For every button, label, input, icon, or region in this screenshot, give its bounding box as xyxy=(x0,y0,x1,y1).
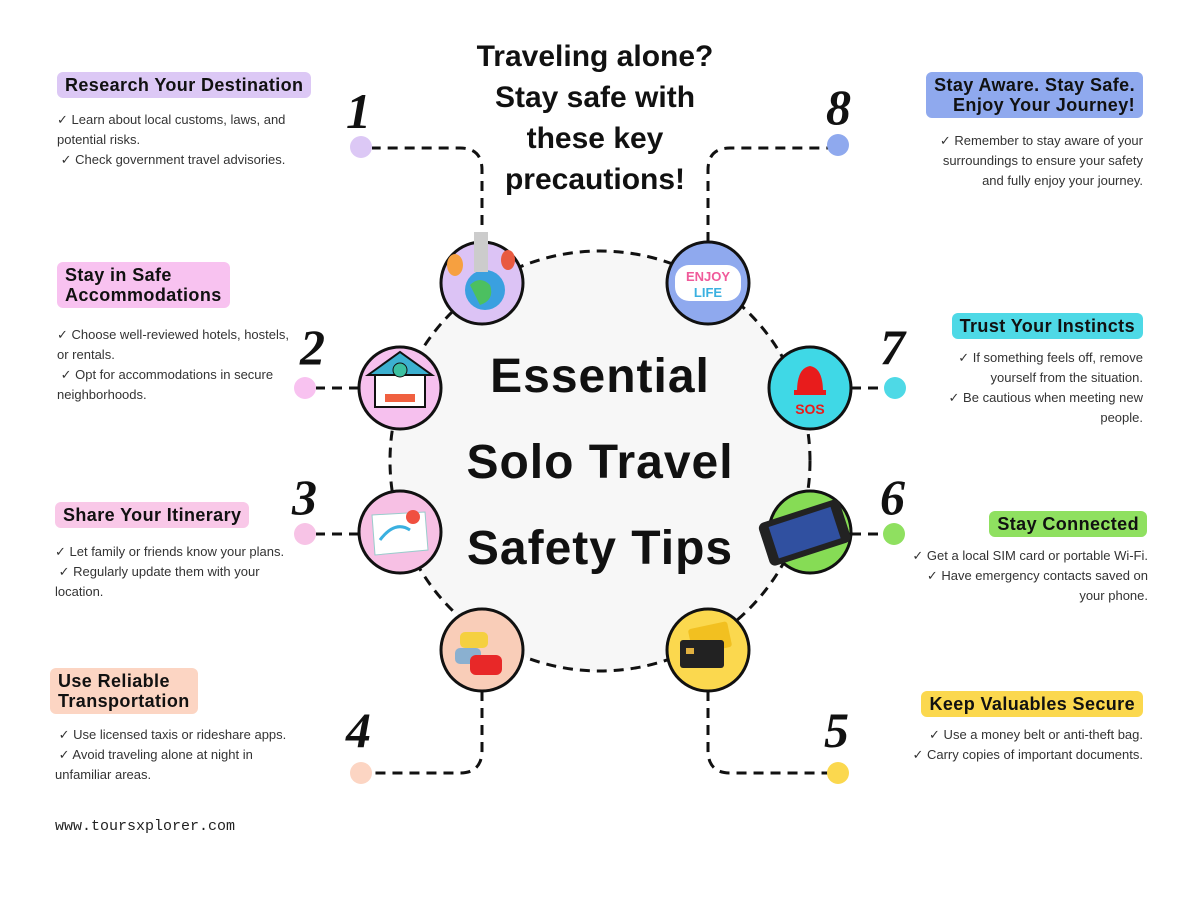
numbers: 1 xyxy=(346,83,371,139)
title: Essential Solo Travel Safety Tips: Essential xyxy=(490,350,710,403)
panel 8: Enjoy Your Journey! xyxy=(953,95,1135,115)
panel 5: Keep Valuables Secure xyxy=(929,694,1135,714)
text: 3 xyxy=(292,469,317,525)
title: Essential Solo Travel Safety Tips: Safety Tips xyxy=(467,522,733,575)
dots xyxy=(294,134,906,784)
panel 4: Transportation xyxy=(58,691,190,711)
title: Essential Solo Travel Safety Tips: Solo Travel xyxy=(466,436,734,489)
title: Traveling alone? xyxy=(477,40,713,73)
icon: SOS bell: SOS xyxy=(795,401,825,417)
panel 2: Accommodations xyxy=(65,285,222,305)
text: 6 xyxy=(880,469,905,525)
text: ✓ Learn about local customs, laws, and potential risks. xyxy=(57,112,285,147)
text: ✓ Check government travel advisories. xyxy=(61,152,285,167)
text: ✓ Get a local SIM card or portable Wi-Fi. xyxy=(912,548,1148,563)
panel 7: Trust Your Instincts xyxy=(960,316,1135,336)
text: ✓ Use licensed taxis or rideshare apps. xyxy=(59,727,286,742)
text: ✓ If something feels off, remove yourself from the situation. xyxy=(958,350,1143,385)
icon: SOS bell xyxy=(794,366,826,417)
text: ✓ Be cautious when meeting new people. xyxy=(949,390,1143,425)
panel 2: Stay in Safe xyxy=(65,265,172,285)
text: ✓ Choose well-reviewed hotels, hostels, or rentals. xyxy=(57,327,289,362)
text: 4 xyxy=(346,702,371,758)
text: ✓ Let family or friends know your plans. xyxy=(55,544,284,559)
title: precautions! xyxy=(505,163,685,196)
icon circles xyxy=(359,242,851,691)
text: ✓ Carry copies of important documents. xyxy=(912,747,1143,762)
icon: map xyxy=(372,510,428,555)
icon: globe xyxy=(447,232,515,310)
text: 5 xyxy=(824,702,849,758)
panel 4 xyxy=(50,668,198,714)
icon: enjoy life: LIFE xyxy=(694,285,722,300)
icon: enjoy life: ENJOY xyxy=(686,269,730,284)
icon: phone xyxy=(757,498,852,567)
panel 4: Use Reliable xyxy=(58,671,170,691)
footer url: www.toursxplorer.com xyxy=(55,818,235,835)
icon: enjoy life xyxy=(675,265,741,301)
panel 2 xyxy=(57,262,230,308)
panel 8: Stay Aware. Stay Safe. xyxy=(934,75,1135,95)
icon: cars xyxy=(455,632,502,675)
panel 3: Share Your Itinerary xyxy=(63,505,241,525)
text: 2 xyxy=(300,319,325,375)
text: 7 xyxy=(880,319,905,375)
text: ✓ Opt for accommodations in secure neighborhoods. xyxy=(57,367,273,402)
panel 1: Research Your Destination xyxy=(65,75,303,95)
title: these key xyxy=(527,122,663,155)
title: Essential Solo Travel Safety Tips xyxy=(466,350,734,575)
panel 6 xyxy=(989,511,1147,537)
text: ✓ Regularly update them with your location. xyxy=(55,564,260,599)
title xyxy=(476,40,713,196)
icon: cards xyxy=(680,621,732,668)
title: Stay safe with xyxy=(495,81,695,114)
panel 6: Stay Connected xyxy=(997,514,1139,534)
text: ✓ Use a money belt or anti-theft bag. xyxy=(929,727,1143,742)
icon: hotel xyxy=(368,352,432,407)
panel 8 xyxy=(926,72,1143,118)
text: ✓ Remember to stay aware of your surroundings to ensure your safety and fully enjoy your journey. xyxy=(940,133,1143,188)
text: ✓ Have emergency contacts saved on your phone. xyxy=(927,568,1148,603)
text: ✓ Avoid traveling alone at night in unfamiliar areas. xyxy=(55,747,253,782)
text: 8 xyxy=(826,79,851,135)
